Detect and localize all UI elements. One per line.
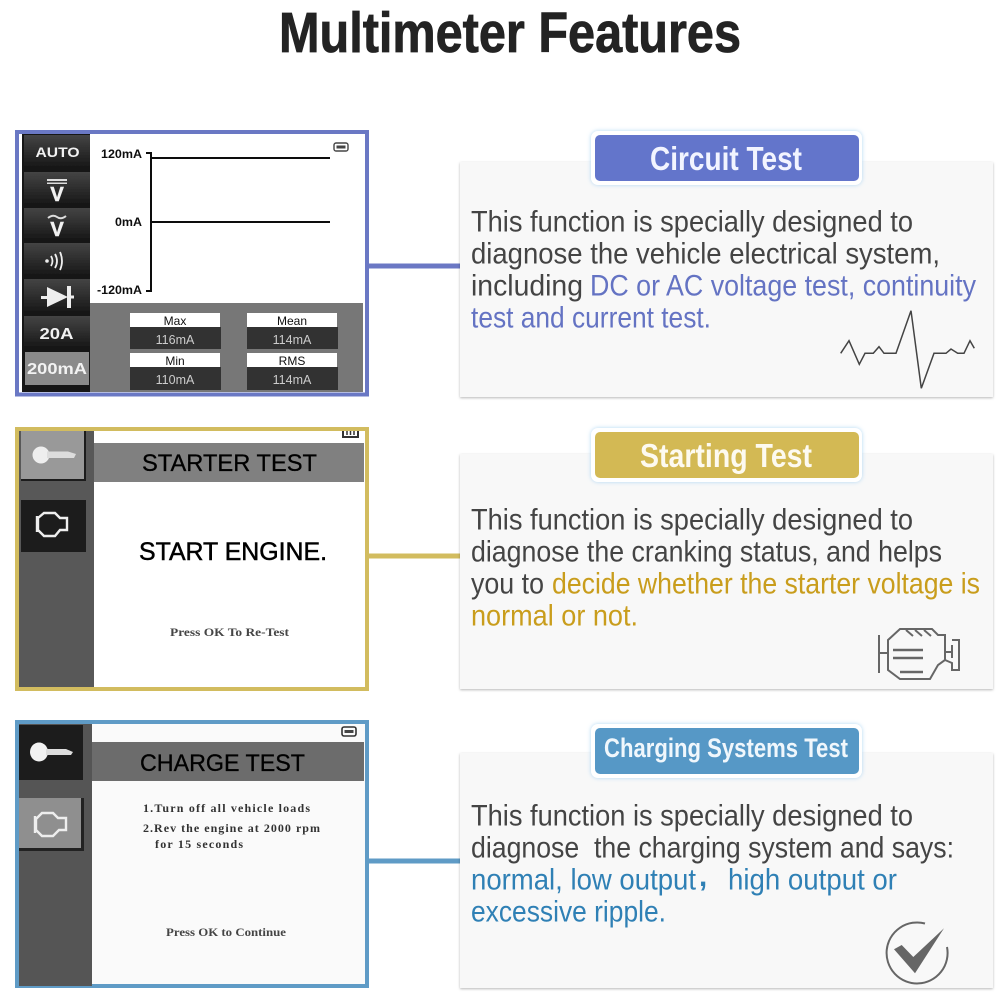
chart: current waveform: 120mA [101, 149, 142, 161]
button: key [19, 725, 83, 780]
text: description: excessive ripple. [471, 896, 666, 928]
button: continuity [24, 243, 90, 278]
connector: starting test [367, 554, 462, 558]
chart: current waveform: 0mA [115, 217, 142, 229]
text: instructions: 2.Rev the engine at 2000 rpm [143, 821, 320, 835]
badge: Starting Test [591, 428, 862, 482]
readout panel: Max [164, 314, 186, 328]
panel: circuit test description [460, 131, 993, 397]
text: description: test and current test. [471, 302, 711, 334]
button: 20A: 20A [40, 326, 74, 343]
panel: circuit test screen [17, 132, 367, 394]
text: START ENGINE: START ENGINE. [139, 538, 327, 566]
text: description: normal or not. [471, 600, 638, 632]
badge: Charging Systems Test: Charging Systems Test [604, 733, 848, 763]
readout panel: Min [165, 354, 185, 368]
badge: Charging Systems Test [591, 724, 862, 778]
text: instructions: 1.Turn off all vehicle loads [143, 801, 310, 815]
icon: check mark [887, 922, 948, 983]
text: description [471, 206, 976, 334]
panel: charging systems test description [460, 724, 993, 988]
button: key [21, 431, 86, 481]
readout panel: 114mA [273, 333, 312, 347]
text: description: you to [471, 568, 544, 600]
badge: Circuit Test [591, 131, 862, 185]
chart: current waveform [90, 134, 363, 303]
panel: charge test screen [17, 722, 367, 986]
connector: charging systems test [367, 858, 462, 864]
text: description [471, 800, 954, 928]
icon: battery [334, 143, 348, 151]
readout panel: 114mA [273, 373, 312, 387]
readout panel: 110mA [156, 373, 195, 387]
button: AC voltage: V [50, 219, 64, 241]
button: DC voltage: V [50, 184, 64, 206]
text: description: diagnose the vehicle electrical system, [471, 238, 940, 270]
icon: engine [879, 629, 959, 679]
text: instructions [143, 801, 320, 851]
text: description: This function is specially designed to [471, 206, 913, 238]
button: AUTO: AUTO [36, 144, 80, 160]
button: DC voltage [24, 172, 90, 207]
text: description: diagnose the charging system and says: [471, 832, 954, 864]
text: instructions: for 15 seconds [155, 837, 243, 851]
readout panel: 116mA [156, 333, 195, 347]
button: diode [24, 279, 90, 315]
badge: Circuit Test: Circuit Test [650, 140, 802, 177]
panel: starter test screen [17, 429, 367, 689]
connector: circuit test [367, 264, 462, 268]
title: Multimeter Features [279, 1, 741, 65]
icon: waveform [841, 311, 974, 388]
text: description: This function is specially designed to [471, 800, 913, 832]
badge: Starting Test: Starting Test [640, 437, 812, 474]
button: 20A [24, 316, 90, 350]
text: description: This function is specially designed to [471, 504, 913, 536]
text: description: high output or [728, 864, 897, 896]
icon: battery [343, 431, 358, 437]
button: AC voltage [24, 208, 90, 242]
button: 200mA: 200mA [27, 361, 87, 378]
readout panel [90, 303, 363, 392]
text: press OK to re-test: Press OK To Re-Test [170, 625, 289, 639]
button: engine [19, 798, 84, 851]
text: description: including [471, 270, 583, 302]
button: engine [21, 500, 86, 552]
heading: CHARGE TEST: CHARGE TEST [140, 750, 305, 777]
button: 200mA [25, 352, 89, 385]
button: AUTO [24, 135, 90, 170]
text: description: normal, low output [471, 864, 696, 896]
readout panel: Mean [277, 314, 307, 328]
text: description [471, 504, 980, 632]
readout panel: RMS [279, 354, 305, 368]
text: description: , [699, 860, 707, 893]
text: press OK to continue: Press OK to Continue [166, 925, 287, 939]
text: description: diagnose the cranking status, and helps [471, 536, 942, 568]
chart: current waveform: -120mA [97, 285, 142, 297]
icon: battery [342, 727, 356, 736]
panel: starting test description [460, 428, 993, 689]
heading: STARTER TEST: STARTER TEST [142, 450, 317, 477]
